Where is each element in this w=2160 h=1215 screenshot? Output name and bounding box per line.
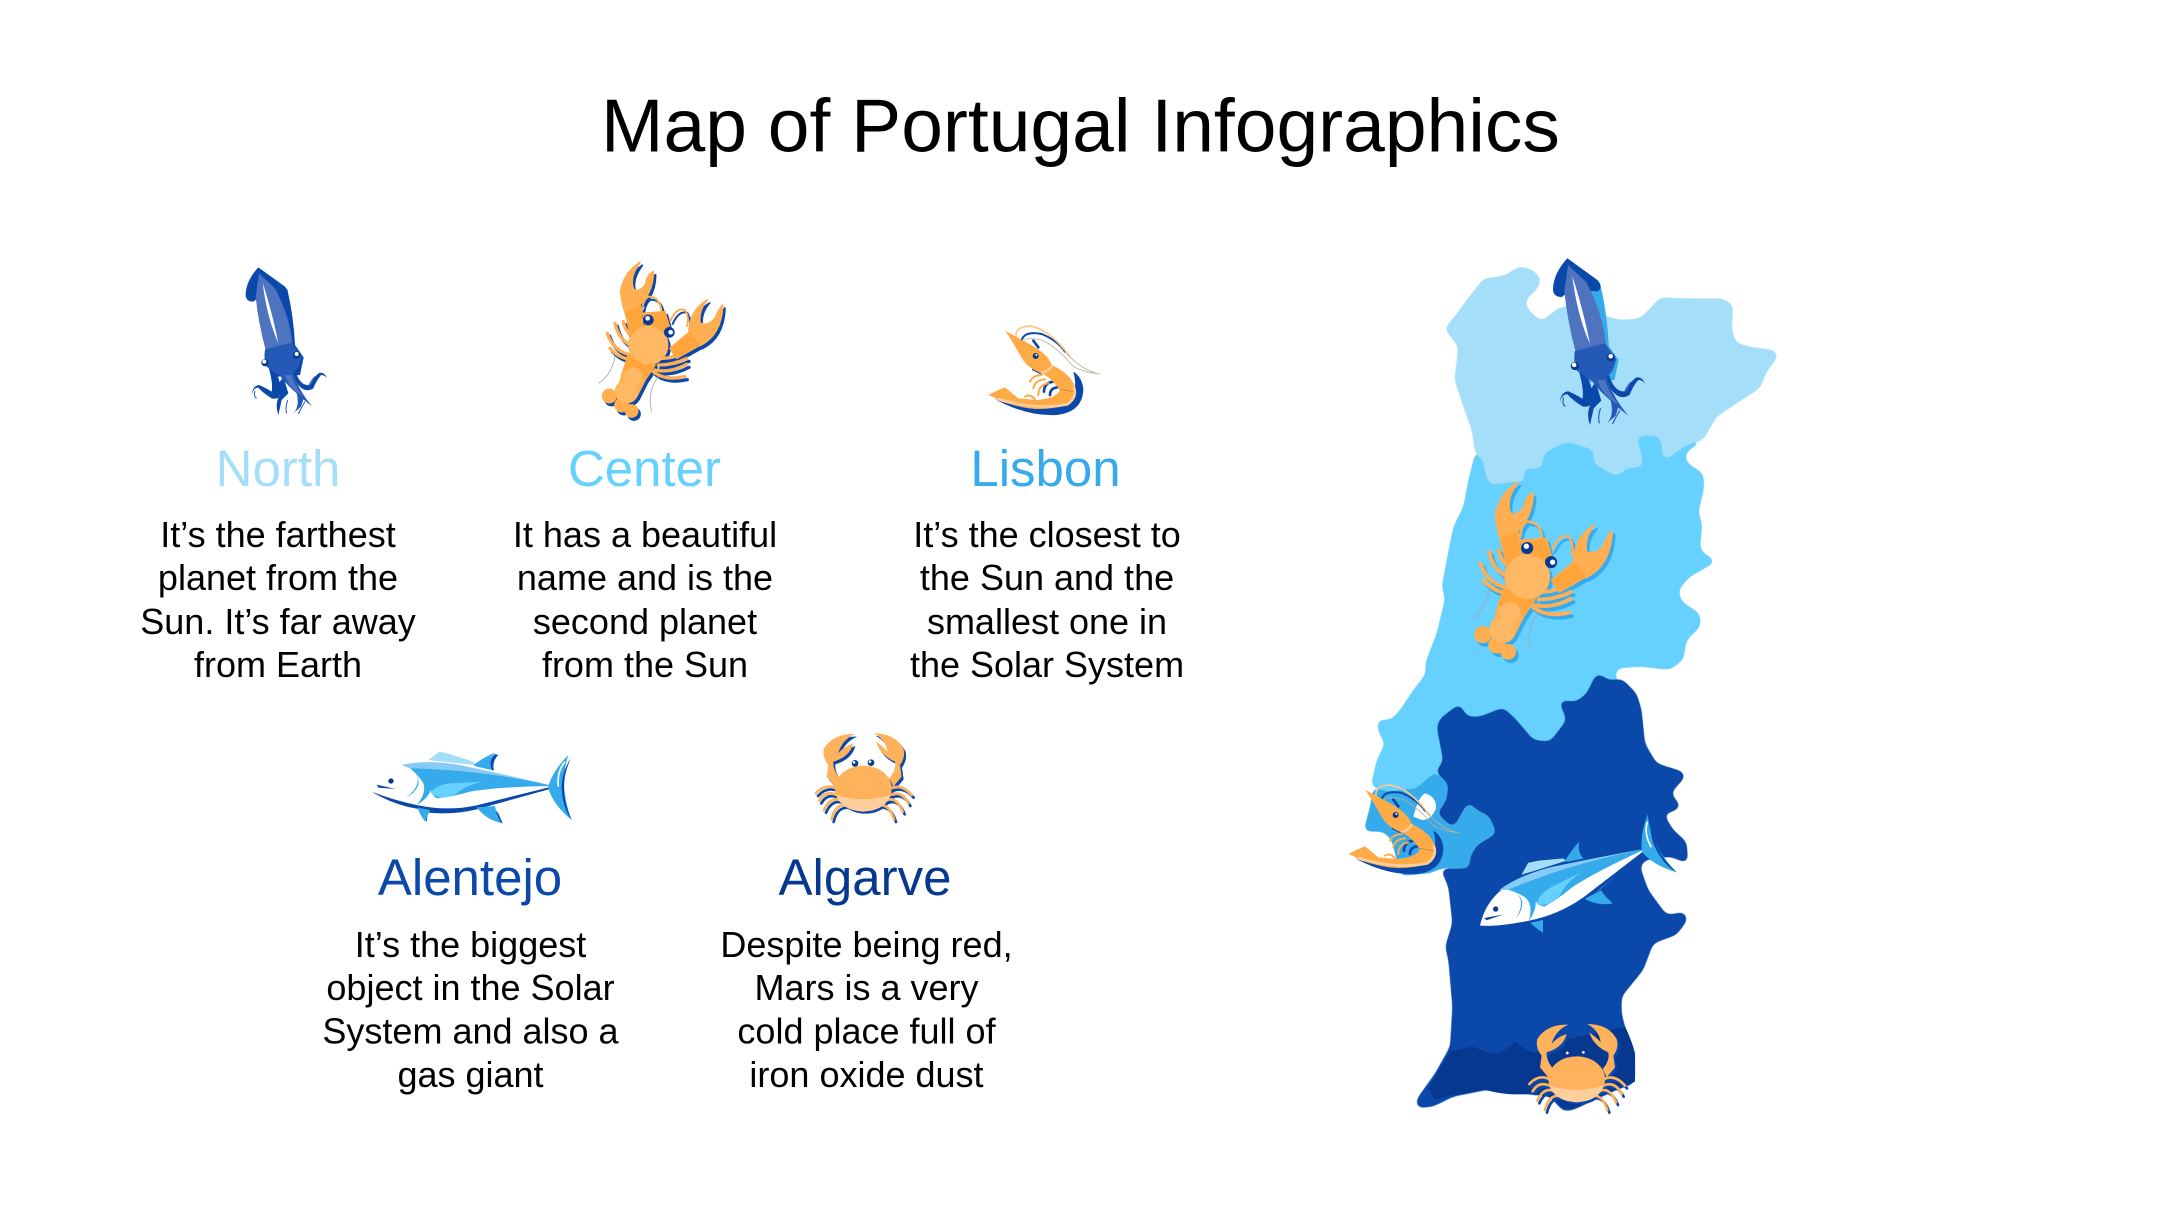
text block: Lisbon [910,514,1184,685]
marker: tuna [1465,810,1678,956]
title: Map of Portugal Infographics [601,84,1560,168]
panel: Algarve [720,733,1013,1095]
text block: Center: It has a beautiful [513,514,777,555]
region: Alentejo [1416,673,1688,1112]
text block: Alentejo: object in the Solar [326,967,615,1008]
marker: squid [1553,258,1645,425]
text block: North: Sun. It’s far away [140,601,416,642]
region: Algarve [1428,1027,1635,1108]
marker: lobster [1470,482,1615,662]
text block: Algarve: cold place full of [737,1010,997,1052]
text block: North: from Earth [194,644,362,685]
icon: shrimp [988,326,1100,415]
text block: Alentejo [322,924,620,1095]
heading: Lisbon: Lisbon [970,440,1121,497]
text block: Lisbon: the Solar System [910,644,1184,685]
text block: Lisbon: the Sun and the [920,557,1174,598]
text block: Center: second planet [533,601,757,642]
panel: Lisbon [910,326,1184,685]
panel: North [140,267,416,685]
icon: lobster [598,262,725,420]
region: Center [1371,427,1717,807]
text block: Alentejo: System and also a [322,1010,620,1052]
text block: North: planet from the [158,557,398,598]
heading: Algarve: Algarve [779,849,951,906]
text block: Lisbon: It’s the closest to [913,514,1181,555]
text block: Lisbon: smallest one in [927,601,1167,642]
text block: Alentejo: It’s the biggest [355,924,586,965]
marker: crab [1529,1024,1627,1113]
text block: North: It’s the farthest [160,514,396,555]
text block: Alentejo: gas giant [397,1054,544,1095]
map of Portugal [1348,258,1778,1113]
icon: squid [246,267,327,415]
text block: Algarve [720,924,1013,1095]
text block: North [140,514,416,685]
text block: Algarve: Mars is a very [754,967,979,1008]
panel: Center [513,262,777,685]
icon: tuna [370,752,572,823]
text block: Center [513,514,777,685]
panel: Alentejo [322,752,620,1095]
text block: Center: from the Sun [542,644,748,685]
text block: Algarve: Despite being red, [720,924,1013,965]
heading: Center: Center [568,440,721,497]
heading: North: North [216,440,340,497]
marker: shrimp [1348,785,1460,874]
text block: Center: name and is the [517,557,773,598]
region: Lisbon [1363,772,1497,876]
text block: Algarve: iron oxide dust [749,1054,984,1095]
heading: Alentejo: Alentejo [378,849,562,906]
icon: crab [816,733,914,822]
region: North [1444,266,1778,485]
